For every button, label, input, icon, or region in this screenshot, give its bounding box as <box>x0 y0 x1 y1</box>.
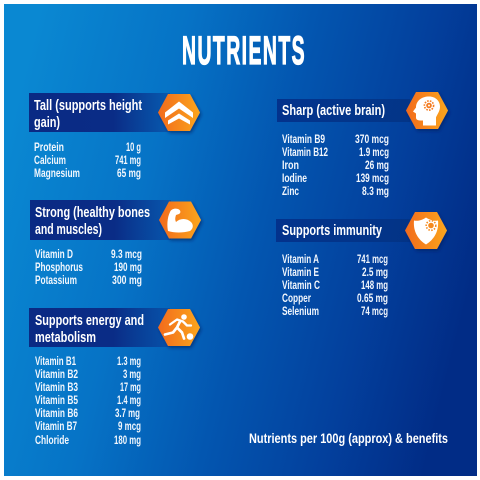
nutrient table: tall: 10 g <box>126 140 141 154</box>
nutrient table: immunity: 741 mcg <box>357 252 388 266</box>
nutrient table: sharp: Vitamin B12 <box>282 145 328 159</box>
nutrient table: strong: 9.3 mcg <box>111 247 142 261</box>
heading: tall: gain) <box>34 114 60 131</box>
nutrient table: energy: 3.7 mg <box>115 406 140 420</box>
nutrient table: sharp: Vitamin B9 <box>282 132 325 146</box>
heading bar: tall <box>29 93 170 132</box>
nutrient table: sharp: Zinc <box>282 184 299 198</box>
nutrient table: energy: Chloride <box>35 433 69 447</box>
nutrient table: immunity: Vitamin A <box>282 252 319 266</box>
panel: sharp <box>277 92 448 198</box>
nutrient table: energy: 9 mcg <box>118 419 141 433</box>
nutrient table: energy: 1.4 mg <box>117 393 141 407</box>
nutrient table: strong: 300 mg <box>112 273 142 287</box>
nutrient table: sharp: 8.3 mg <box>362 184 389 198</box>
heading bar: sharp <box>277 99 410 122</box>
heading: strong: Strong (healthy bones <box>35 204 150 221</box>
nutrient table: sharp: 139 mcg <box>356 171 389 185</box>
nutrient table: energy: Vitamin B6 <box>35 406 78 420</box>
nutrient table: immunity: Vitamin E <box>282 265 319 279</box>
nutrient table: immunity: 148 mg <box>361 278 388 292</box>
nutrient table: immunity: 0.65 mg <box>357 291 388 305</box>
heading bar: energy <box>29 308 170 347</box>
nutrient table: tall: 65 mg <box>117 166 141 180</box>
nutrient table: tall: Magnesium <box>34 166 80 180</box>
icon: flexed arm <box>159 202 201 238</box>
heading bar: strong <box>30 200 171 240</box>
nutrient table: tall <box>34 140 141 180</box>
nutrient table: tall: Protein <box>34 140 64 154</box>
nutrient table: energy: Vitamin B1 <box>35 354 76 368</box>
heading: tall <box>34 97 142 131</box>
panel: immunity <box>276 212 447 318</box>
icon: shield with virus <box>405 212 447 249</box>
nutrient table: strong: Vitamin D <box>35 247 73 261</box>
nutrient table: energy: Vitamin B2 <box>35 367 78 381</box>
nutrient table: tall: 741 mg <box>115 153 141 167</box>
panel: tall <box>29 93 200 180</box>
nutrient table: energy: Vitamin B5 <box>35 393 78 407</box>
icon: football player <box>158 309 200 346</box>
nutrient table: strong: Phosphorus <box>35 260 83 274</box>
heading: strong <box>35 204 150 238</box>
nutrient table: immunity: Selenium <box>282 304 319 318</box>
heading: energy: metabolism <box>35 329 96 346</box>
nutrient table: sharp: 1.9 mcg <box>359 145 389 159</box>
nutrient table: sharp: Iron <box>282 158 299 172</box>
nutrient table: energy: 17 mg <box>120 380 141 394</box>
nutrient table: strong: Potassium <box>35 273 77 287</box>
heading: immunity: Supports immunity <box>282 222 382 239</box>
nutrient table: energy <box>35 354 141 447</box>
nutrient table: immunity: Vitamin C <box>282 278 320 292</box>
icon: chevrons up <box>158 94 200 131</box>
panel: energy <box>29 308 200 447</box>
nutrient table: strong <box>35 247 142 287</box>
nutrient table: sharp <box>282 132 389 198</box>
nutrient table: sharp: 26 mg <box>365 158 389 172</box>
nutrient table: immunity <box>282 252 388 318</box>
nutrient table: energy: 3 mg <box>123 367 141 381</box>
nutrient table: immunity: 74 mcg <box>361 304 388 318</box>
text: NUTRIENTS <box>182 29 306 73</box>
heading bar: immunity <box>276 219 410 242</box>
nutrient table: strong: 190 mg <box>114 260 142 274</box>
nutrient table: energy: 1.3 mg <box>117 354 141 368</box>
heading: energy <box>35 312 144 346</box>
heading: strong: and muscles) <box>35 221 102 238</box>
nutrient table: energy: 180 mg <box>114 433 141 447</box>
nutrient table: sharp: Iodine <box>282 171 307 185</box>
heading: tall: Tall (supports height <box>34 97 142 114</box>
heading: energy: Supports energy and <box>35 312 144 329</box>
panel: strong <box>30 200 201 287</box>
heading: sharp: Sharp (active brain) <box>282 102 385 119</box>
nutrient table: energy: Vitamin B7 <box>35 419 77 433</box>
nutrient table: sharp: 370 mcg <box>355 132 389 146</box>
icon: head with gear <box>406 92 448 129</box>
nutrient table: tall: Calcium <box>34 153 66 167</box>
nutrient table: energy: Vitamin B3 <box>35 380 78 394</box>
nutrient table: immunity: 2.5 mg <box>362 265 388 279</box>
nutrient table: immunity: Copper <box>282 291 311 305</box>
